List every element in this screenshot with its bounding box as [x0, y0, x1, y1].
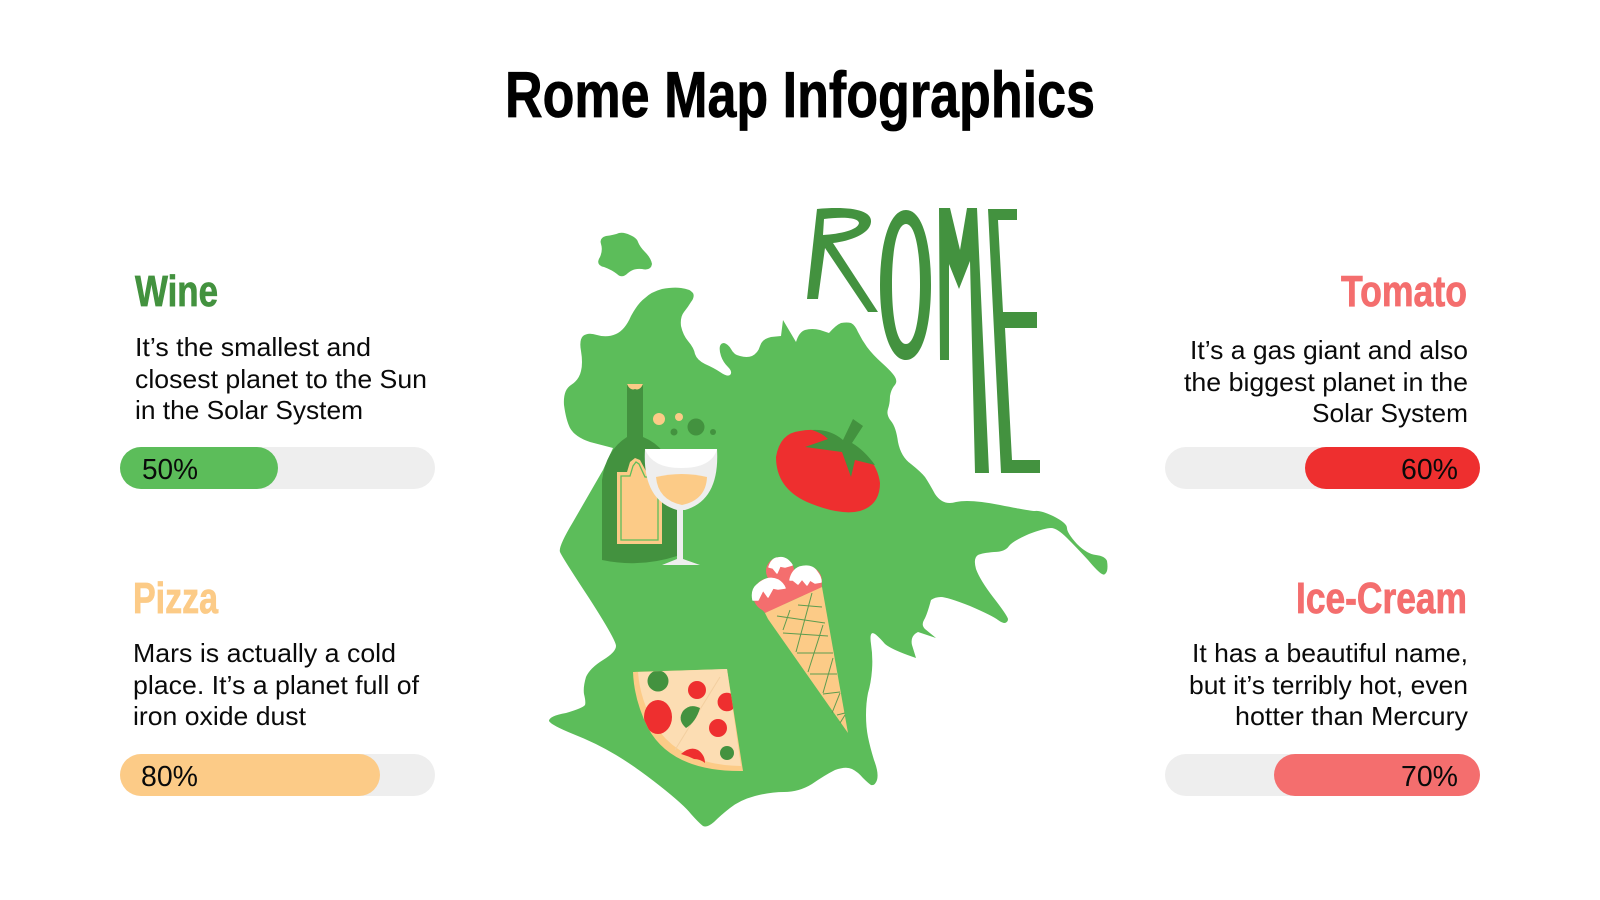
text block: pizza description — [133, 638, 420, 731]
panel: wine — [120, 267, 435, 489]
icon: ice-cream cone — [752, 557, 848, 733]
lettering: ROME — [807, 208, 1040, 473]
progress bar: tomato 60%: 60% — [1401, 454, 1458, 486]
progress bar: ice-cream 70% — [1165, 754, 1480, 796]
progress bar: pizza 80% — [120, 754, 435, 796]
icon: pizza slice — [633, 669, 743, 771]
heading: tomato: Tomato — [1341, 267, 1467, 316]
text block: tomato description — [1184, 335, 1468, 428]
heading: ice-cream: Ice-Cream — [1296, 574, 1467, 623]
text block: tomato description: It’s a gas giant and also — [1190, 335, 1468, 365]
progress bar: wine 50%: 50% — [142, 454, 198, 486]
progress bar: ice-cream 70%: 70% — [1401, 761, 1458, 793]
panel: ice-cream — [1165, 574, 1480, 796]
title: Rome Map Infographics — [505, 58, 1095, 131]
text block: tomato description: the biggest planet in the — [1184, 367, 1468, 397]
text block: wine description: in the Solar System — [135, 395, 363, 425]
heading: pizza: Pizza — [133, 574, 218, 623]
map of Rome — [549, 208, 1108, 826]
text block: ice-cream description — [1189, 638, 1468, 731]
panel: pizza — [120, 574, 435, 796]
map shape: region and island — [549, 233, 1108, 826]
text block: pizza description: place. It’s a planet full of — [133, 670, 420, 700]
text block: pizza description: Mars is actually a cold — [133, 638, 396, 668]
icon: wine bottle and glass — [602, 384, 717, 565]
progress bar: wine 50% — [120, 447, 435, 489]
heading: wine: Wine — [135, 267, 218, 316]
text block: tomato description: Solar System — [1312, 398, 1468, 428]
text block: wine description: It’s the smallest and — [135, 332, 371, 362]
text block: wine description: closest planet to the Sun — [135, 364, 427, 394]
icon: tomato — [776, 419, 880, 512]
progress bar: tomato 60% — [1165, 447, 1480, 489]
text block: ice-cream description: hotter than Mercury — [1235, 701, 1468, 731]
text block: ice-cream description: It has a beautiful name, — [1192, 638, 1468, 668]
text block: ice-cream description: but it’s terribly hot, even — [1189, 670, 1468, 700]
panel: tomato — [1165, 267, 1480, 489]
text block: pizza description: iron oxide dust — [133, 701, 307, 731]
progress bar: pizza 80%: 80% — [141, 761, 198, 793]
text block: wine description — [135, 332, 427, 425]
